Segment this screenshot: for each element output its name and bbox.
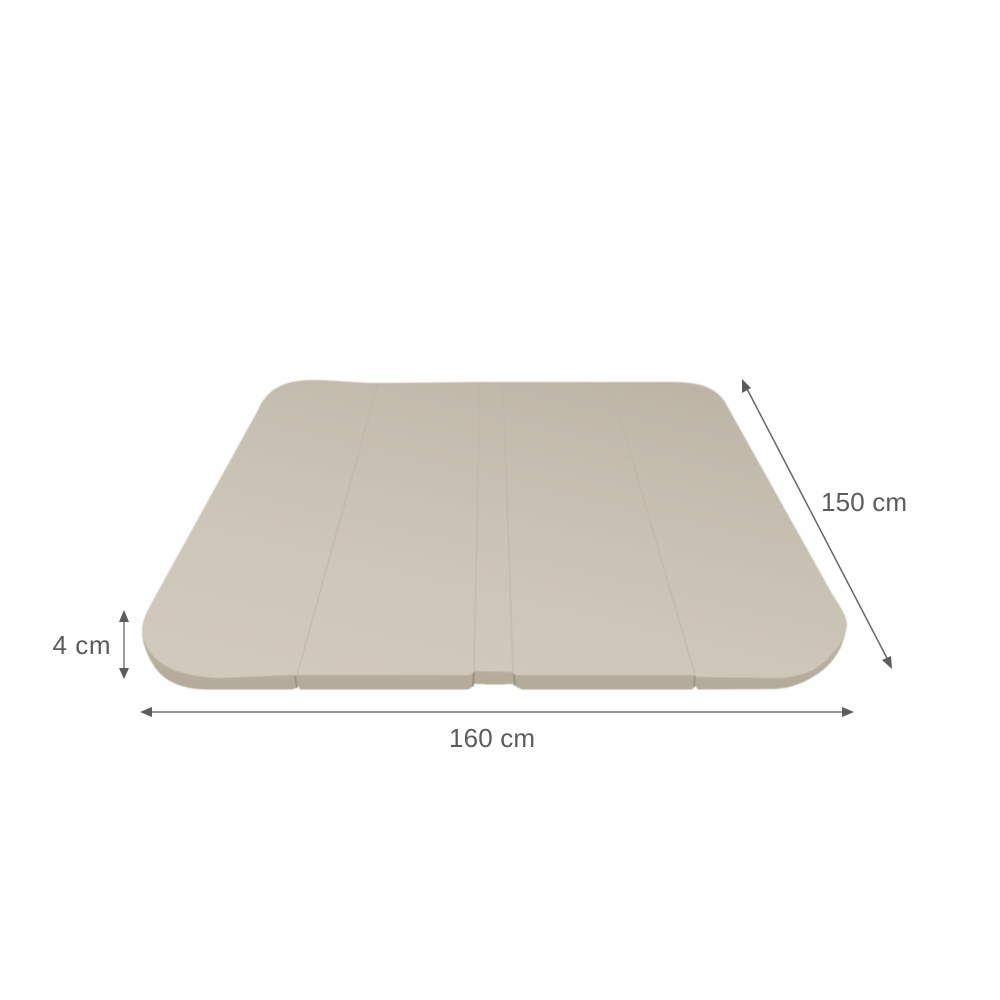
label: 160 cm: 160 cm	[449, 723, 535, 753]
arrow: thickness	[119, 610, 129, 679]
fold lines	[297, 382, 695, 675]
mat top surface	[142, 380, 847, 678]
center clip	[485, 677, 505, 684]
arrow: width	[140, 707, 854, 717]
arrow: depth	[742, 379, 892, 669]
label: 150 cm: 150 cm	[821, 487, 907, 517]
label: 4 cm: 4 cm	[52, 630, 110, 660]
mat side edge	[142, 600, 847, 690]
foam play mat	[142, 380, 847, 690]
notches between panels	[295, 672, 695, 688]
